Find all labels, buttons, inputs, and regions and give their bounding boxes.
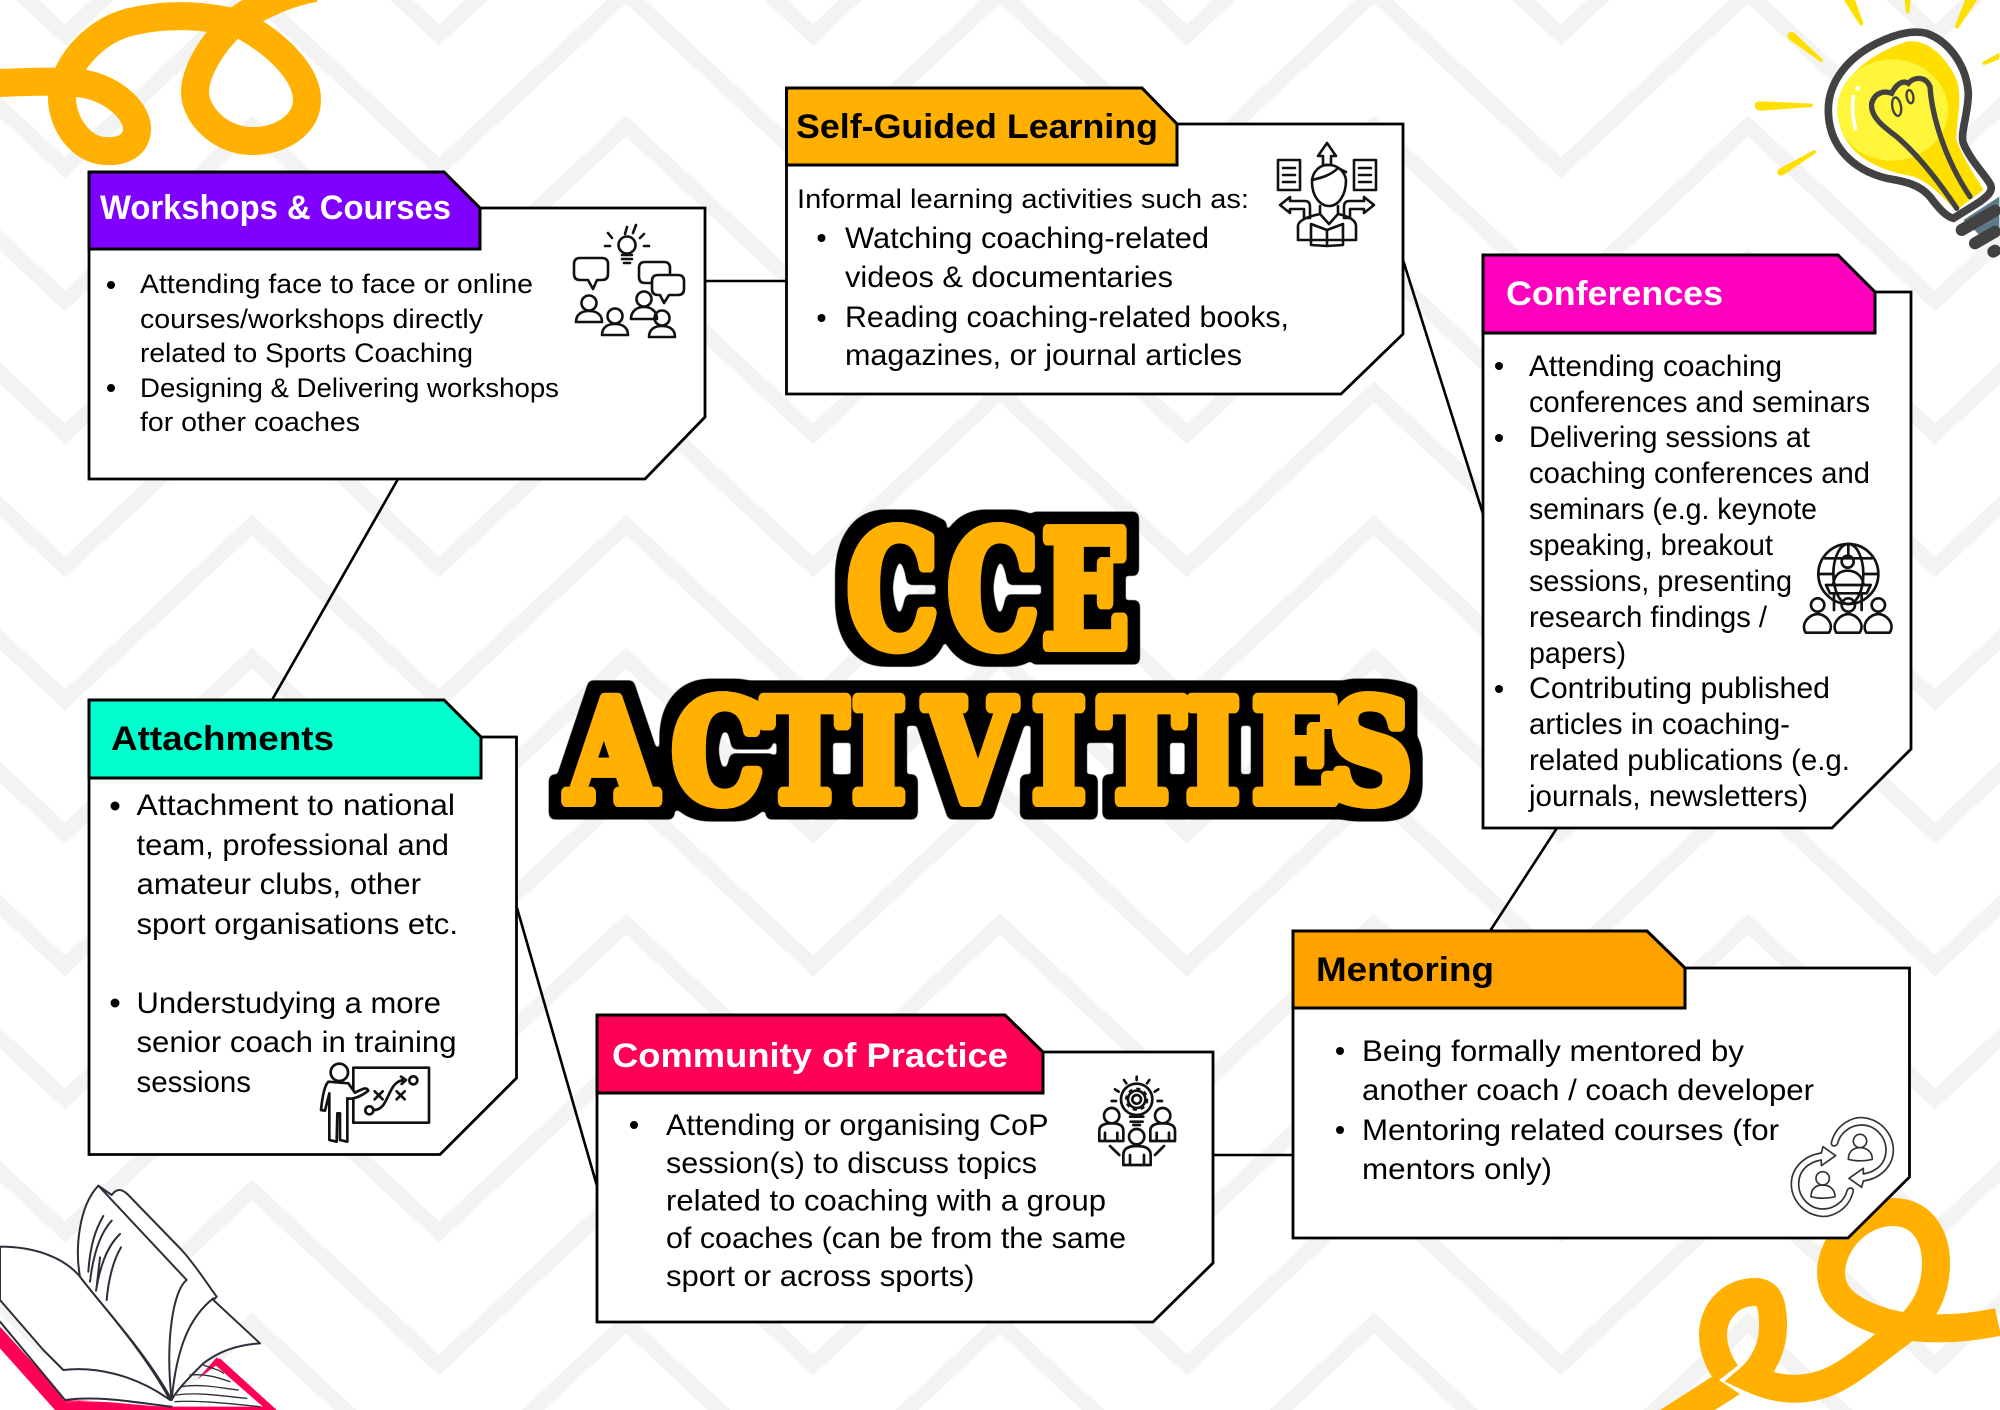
- heading tab: attachments: [89, 700, 481, 778]
- illustration: open book: [0, 1186, 277, 1410]
- title line: ACTIVITIES: ACTIVITIES: [566, 671, 1412, 835]
- title line: CCE: CCE: [847, 497, 1129, 684]
- heading tab: conferences: [1483, 255, 1875, 333]
- icon: group with gear bulb: [1099, 1077, 1175, 1165]
- text: attachments bullets: amateur clubs, other: [136, 868, 421, 901]
- heading tab: self-guided learning: Self-Guided Learning: [796, 108, 1158, 146]
- text: workshops and courses bullets: Attending face to face or online: [140, 269, 533, 299]
- text: conferences bullets: journals, newsletters): [1528, 780, 1808, 813]
- heading tab: mentoring: Mentoring: [1316, 951, 1494, 989]
- text: mentoring bullets: Mentoring related courses (for: [1362, 1114, 1779, 1147]
- panel: community of practice: [597, 1015, 1213, 1322]
- heading tab: self-guided learning: [786, 88, 1177, 165]
- text: community of practice bullet: of coaches (can be from the same: [666, 1222, 1126, 1255]
- text: community of practice bullet: [630, 1109, 1126, 1293]
- text: self-guided learning bullets: magazines, or journal articles: [845, 339, 1242, 372]
- text: community of practice bullet: session(s) to discuss topics: [666, 1147, 1037, 1180]
- text: conferences bullets: papers): [1529, 637, 1626, 670]
- text: conferences bullets: Contributing published: [1529, 672, 1830, 705]
- panel: conferences: [1483, 255, 1911, 828]
- heading tab: conferences: Conferences: [1506, 275, 1723, 313]
- illustration: light bulb: [1755, 0, 1999, 252]
- icon: ideas and discussion group: [574, 225, 684, 337]
- scribble: bottom right: [1660, 1212, 1998, 1410]
- text: mentoring bullets: Being formally mentored by: [1362, 1035, 1744, 1068]
- text: attachments bullets: senior coach in training: [136, 1026, 456, 1059]
- text: attachments bullets: Understudying a more: [136, 987, 441, 1020]
- text: conferences bullets: speaking, breakout: [1529, 529, 1773, 562]
- text: conferences bullets: coaching conferences and: [1529, 457, 1870, 490]
- icon: coach at tactics board: [321, 1064, 429, 1142]
- heading tab: community of practice: [597, 1015, 1043, 1093]
- text: attachments bullets: sport organisations etc.: [136, 908, 458, 941]
- icon: mentor exchange: [1791, 1118, 1893, 1216]
- text: conferences bullets: [1495, 350, 1870, 813]
- icon: global speaker and audience: [1804, 544, 1891, 633]
- text: self-guided learning bullets: Informal learning activities such as:: [797, 184, 1249, 214]
- connector lines between panels: [272, 260, 1557, 1186]
- text: workshops and courses bullets: [107, 269, 559, 437]
- text: conferences bullets: related publications (e.g.: [1529, 744, 1850, 777]
- heading tab: attachments: Attachments: [111, 720, 334, 758]
- text: mentoring bullets: mentors only): [1362, 1153, 1552, 1186]
- text: attachments bullets: team, professional and: [136, 829, 449, 862]
- heading tab: mentoring: [1293, 931, 1685, 1008]
- text: workshops and courses bullets: for other coaches: [140, 407, 360, 437]
- panel: mentoring: [1293, 931, 1910, 1238]
- text: self-guided learning bullets: videos & documentaries: [845, 261, 1173, 294]
- panel: self-guided learning: [786, 88, 1403, 394]
- text: conferences bullets: seminars (e.g. keynote: [1529, 493, 1817, 526]
- scribble: top left: [0, 0, 315, 151]
- heading tab: community of practice: Community of Practice: [612, 1037, 1008, 1075]
- text: workshops and courses bullets: related to Sports Coaching: [140, 338, 473, 368]
- text: community of practice bullet: Attending or organising CoP: [666, 1109, 1048, 1142]
- panel: workshops and courses: [89, 172, 705, 479]
- text: attachments bullets: [110, 789, 458, 1099]
- text: mentoring bullets: another coach / coach developer: [1362, 1074, 1814, 1107]
- text: attachments bullets: sessions: [136, 1066, 251, 1099]
- text: mentoring bullets: [1336, 1035, 1814, 1186]
- text: self-guided learning bullets: [797, 184, 1289, 372]
- text: conferences bullets: sessions, presenting: [1529, 565, 1792, 598]
- text: conferences bullets: research findings /: [1529, 601, 1768, 634]
- text: attachments bullets: Attachment to national: [136, 789, 455, 822]
- heading tab: workshops and courses: Workshops & Courses: [100, 189, 451, 227]
- text: workshops and courses bullets: courses/workshops directly: [140, 304, 484, 334]
- heading tab: workshops and courses: [89, 172, 480, 249]
- text: workshops and courses bullets: Designing & Delivering workshops: [140, 373, 559, 403]
- title: CCE Activities: [566, 497, 1412, 835]
- text: community of practice bullet: sport or across sports): [666, 1260, 974, 1293]
- text: conferences bullets: Delivering sessions at: [1529, 421, 1810, 454]
- panel: attachments: [89, 700, 516, 1154]
- text: community of practice bullet: related to coaching with a group: [666, 1184, 1106, 1218]
- icon: learner with paths: [1278, 143, 1376, 246]
- text: conferences bullets: articles in coaching-: [1529, 708, 1790, 741]
- text: self-guided learning bullets: Reading coaching-related books,: [845, 301, 1289, 334]
- text: self-guided learning bullets: Watching coaching-related: [845, 222, 1209, 255]
- text: conferences bullets: conferences and seminars: [1529, 386, 1870, 419]
- text: conferences bullets: Attending coaching: [1529, 350, 1782, 383]
